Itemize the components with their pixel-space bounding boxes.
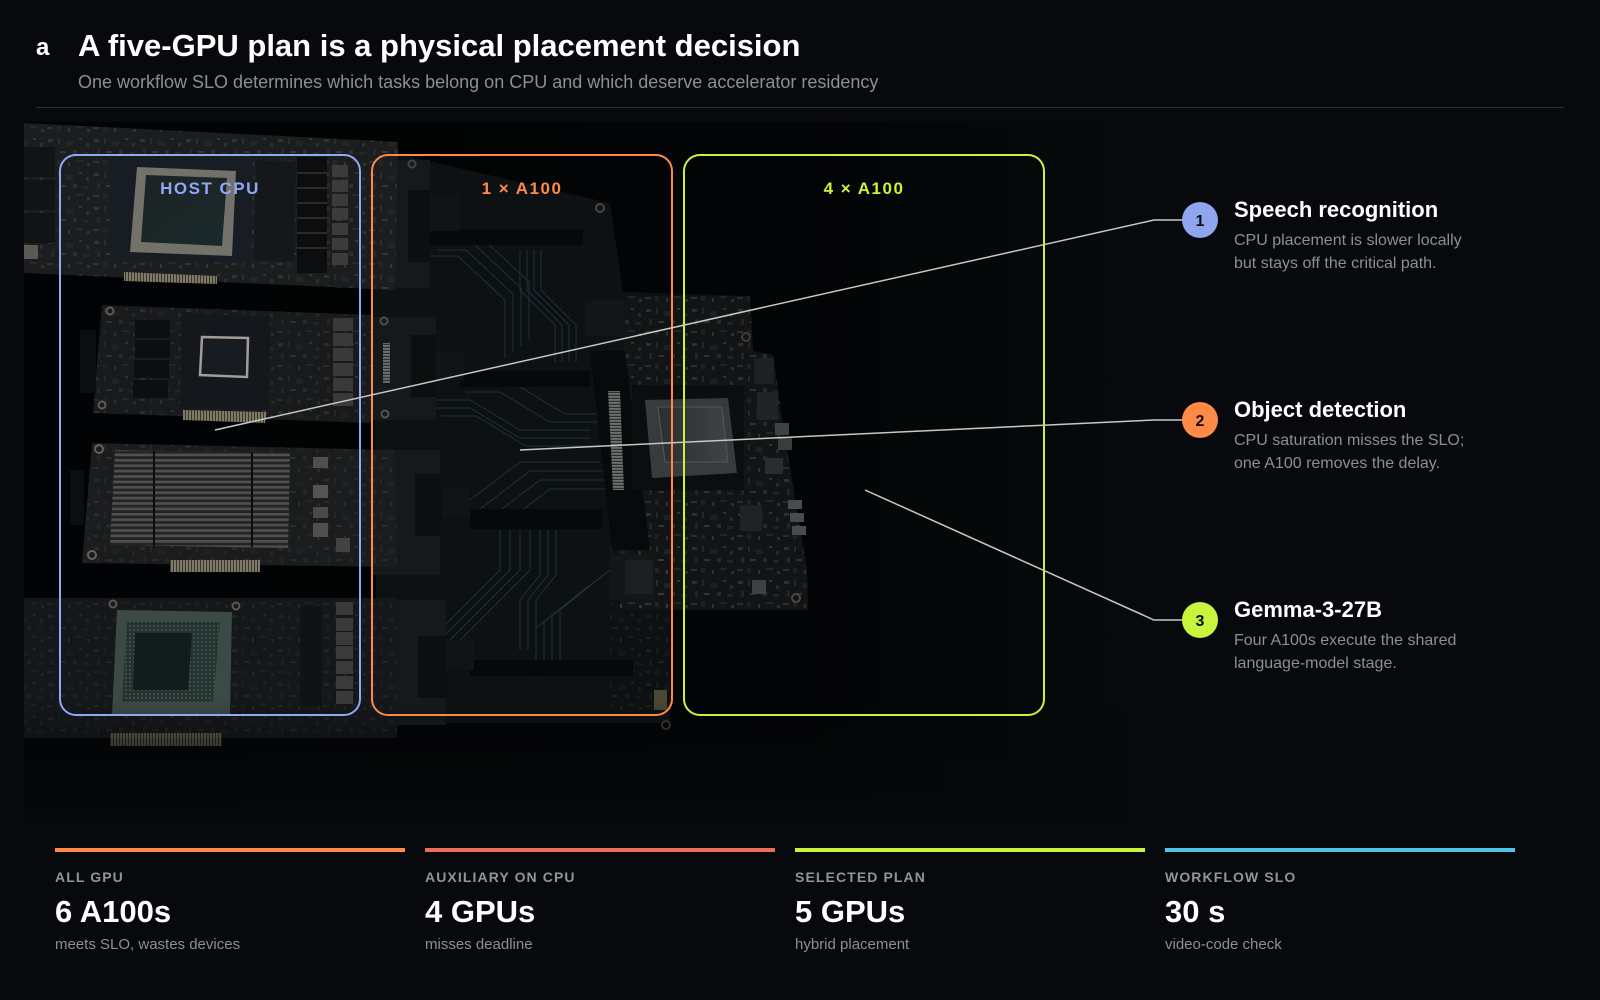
left connector modules xyxy=(372,160,474,726)
photo: GPU boards xyxy=(24,123,808,746)
zone: host CPU: HOST CPU xyxy=(160,179,260,198)
leader line: object detection xyxy=(520,420,1182,450)
callout: speech recognition: but stays off the critical path. xyxy=(1234,255,1436,272)
stat: all GPU xyxy=(55,848,405,953)
zone: 1 × A100 xyxy=(372,155,672,715)
leader line: speech recognition xyxy=(215,220,1182,430)
stat: workflow SLO: WORKFLOW SLO xyxy=(1165,869,1296,885)
middle board with accelerator chip xyxy=(372,148,808,729)
stat: auxiliary on CPU: misses deadline xyxy=(425,936,533,953)
stat: selected plan: hybrid placement xyxy=(795,936,909,953)
heat bars xyxy=(430,229,583,245)
connector spine xyxy=(590,351,650,550)
title: A five-GPU plan is a physical placement decision xyxy=(78,28,800,63)
callout: speech recognition xyxy=(1234,197,1462,272)
callout: object detection: one A100 removes the delay. xyxy=(1234,455,1440,472)
zone: host CPU xyxy=(60,155,360,715)
callout: object detection xyxy=(1234,397,1464,472)
board 1: host CPU card xyxy=(24,123,398,290)
badge 2 xyxy=(1182,402,1218,438)
stat: workflow SLO: 30 s xyxy=(1165,894,1225,929)
stat: all GPU: ALL GPU xyxy=(55,869,124,885)
callout: Gemma xyxy=(1234,597,1456,672)
stat: auxiliary on CPU xyxy=(425,848,775,953)
zone: 1 × A100: 1 × A100 xyxy=(482,179,562,198)
callout: speech recognition: CPU placement is slower locally xyxy=(1234,232,1462,249)
callout: Gemma: Gemma-3-27B xyxy=(1234,597,1382,622)
badge 3 xyxy=(1182,602,1218,638)
board 4: lower GPU card xyxy=(24,598,397,746)
zone: 4 × A100 xyxy=(684,155,1044,715)
callout: object detection: Object detection xyxy=(1234,397,1406,422)
callout: object detection: CPU saturation misses the SLO; xyxy=(1234,432,1464,449)
badge 1 xyxy=(1182,202,1218,238)
stat: workflow SLO xyxy=(1165,848,1515,953)
subtitle: One workflow SLO determines which tasks belong on CPU and which deserve accelerator residency xyxy=(78,72,878,92)
stat: selected plan: SELECTED PLAN xyxy=(795,869,926,885)
photo background xyxy=(24,122,1124,822)
stat: auxiliary on CPU: 4 GPUs xyxy=(425,894,535,929)
stat: auxiliary on CPU: AUXILIARY ON CPU xyxy=(425,869,576,885)
callout: Gemma: Four A100s execute the shared xyxy=(1234,632,1456,649)
zone: 4 × A100: 4 × A100 xyxy=(824,179,904,198)
badge 3: 3 xyxy=(1196,613,1205,630)
stat: workflow SLO: video-code check xyxy=(1165,936,1282,953)
stat: all GPU: 6 A100s xyxy=(55,894,171,929)
board 3: heatsink card xyxy=(70,443,397,572)
side parts xyxy=(754,358,774,384)
leader line: Gemma xyxy=(865,490,1182,620)
panel label: a xyxy=(36,34,49,61)
callout: Gemma: language-model stage. xyxy=(1234,655,1397,672)
chip plate xyxy=(632,385,744,490)
stat: all GPU: meets SLO, wastes devices xyxy=(55,936,240,953)
callout: speech recognition: Speech recognition xyxy=(1234,197,1438,222)
badge 2: 2 xyxy=(1196,413,1205,430)
board 2: mid GPU card xyxy=(80,305,372,423)
badge 1: 1 xyxy=(1196,213,1205,230)
stat: selected plan: 5 GPUs xyxy=(795,894,905,929)
stat: selected plan xyxy=(795,848,1145,953)
